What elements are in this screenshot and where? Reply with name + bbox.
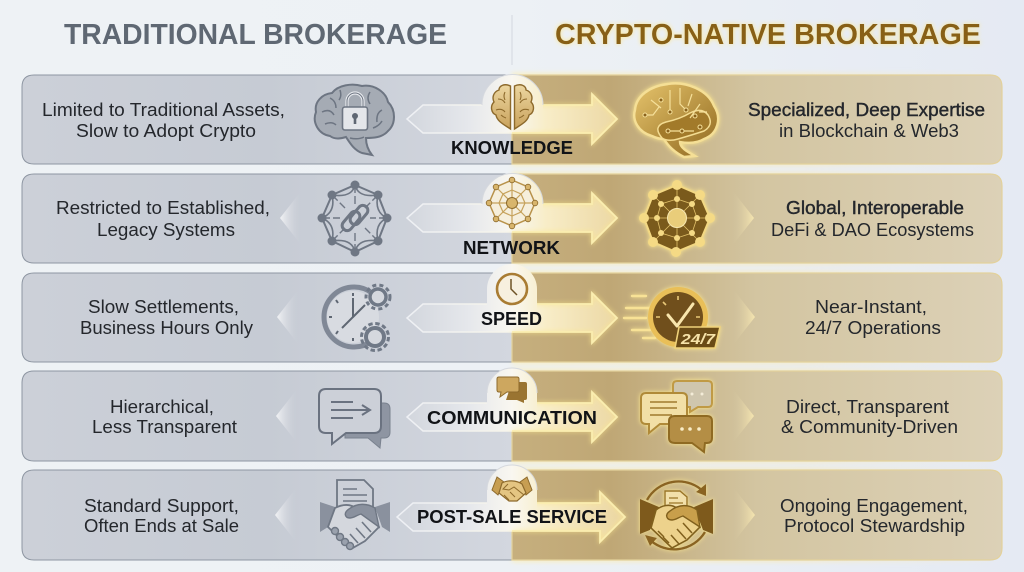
panel: crypto knowledge	[512, 75, 1002, 164]
text: crypto speed: 24/7 Operations	[805, 318, 941, 338]
panel: crypto network	[512, 174, 1002, 263]
icon: 24/7 clock	[624, 287, 720, 348]
icon: broken chain network	[318, 180, 392, 256]
panel: crypto post-sale	[512, 470, 1002, 560]
arrow: knowledge	[407, 94, 617, 144]
panel: traditional post-sale	[22, 470, 512, 560]
text: traditional network: Legacy Systems	[97, 220, 235, 240]
text: crypto post-sale	[780, 496, 968, 536]
text: crypto network: Global, Interoperable	[786, 198, 964, 218]
row: speed	[22, 264, 1002, 362]
icon: gold speech bubbles	[641, 381, 712, 452]
arrow: post-sale	[397, 492, 625, 542]
label: speed: SPEED	[481, 309, 542, 329]
chevron: right post-sale	[733, 487, 755, 543]
text: traditional knowledge: Limited to Traditional Assets,	[42, 100, 285, 120]
chevron: right network	[732, 190, 754, 246]
panel: traditional speed	[22, 273, 512, 362]
text: traditional communication	[92, 397, 237, 437]
text: traditional speed: Slow Settlements,	[88, 297, 239, 317]
chevron: right speed	[733, 289, 755, 345]
text: traditional post-sale	[84, 496, 239, 536]
panel glow: crypto side	[512, 75, 990, 560]
heading: crypto-native brokerage: CRYPTO-NATIVE BROKERAGE	[555, 19, 981, 51]
text: crypto post-sale: Ongoing Engagement,	[780, 496, 968, 516]
icon: speech bubbles	[319, 389, 390, 448]
label: network: NETWORK	[463, 238, 560, 258]
icon: circuit brain	[634, 83, 718, 157]
icon: gold handshake with cycle arrows	[640, 481, 713, 549]
text: traditional post-sale: Often Ends at Sale	[84, 516, 239, 536]
panel: traditional network	[22, 174, 512, 263]
icon badge: network	[482, 173, 543, 229]
icon badge: knowledge	[482, 74, 543, 129]
text: crypto communication: Direct, Transparent	[786, 397, 949, 417]
text: traditional knowledge	[42, 100, 285, 141]
text: crypto network	[771, 198, 974, 240]
icon: handshake with document	[320, 480, 390, 550]
row: network	[22, 173, 1002, 263]
icon badge: communication	[487, 368, 537, 410]
chevron: left communication	[276, 388, 298, 444]
text: crypto post-sale: Protocol Stewardship	[784, 516, 965, 536]
row: knowledge	[22, 74, 1002, 164]
icon: clock with gears	[324, 285, 390, 350]
panel: traditional knowledge	[22, 75, 512, 164]
icon badge: post-sale	[487, 465, 537, 510]
chevron: left post-sale	[275, 487, 297, 543]
text: traditional network	[56, 198, 270, 240]
text: crypto speed: Near-Instant,	[815, 297, 927, 317]
text: traditional communication: Less Transparent	[92, 417, 237, 437]
text: crypto communication	[781, 397, 958, 437]
heading: traditional brokerage: TRADITIONAL BROKERAGE	[64, 19, 447, 51]
text: traditional speed: Business Hours Only	[80, 318, 253, 338]
arrow: network	[407, 193, 617, 243]
text: crypto knowledge: Specialized, Deep Expertise	[748, 100, 985, 120]
text: traditional post-sale: Standard Support,	[84, 496, 239, 516]
text: traditional network: Restricted to Established,	[56, 198, 270, 218]
panel: traditional communication	[22, 371, 512, 461]
text: crypto knowledge: in Blockchain & Web3	[779, 121, 959, 141]
arrow: speed	[407, 293, 617, 343]
row: post-sale service	[22, 465, 1002, 560]
label: knowledge: KNOWLEDGE	[451, 138, 573, 158]
row: communication	[22, 368, 1002, 461]
text: crypto speed	[805, 297, 941, 338]
text: crypto network: DeFi & DAO Ecosystems	[771, 220, 974, 240]
text: crypto knowledge	[748, 100, 985, 141]
icon: brain with lock	[315, 85, 394, 155]
label: communication: COMMUNICATION	[427, 408, 597, 428]
text: traditional speed	[80, 297, 253, 338]
panel: crypto communication	[512, 371, 1002, 461]
chevron: right communication	[732, 388, 754, 444]
panel: crypto speed	[512, 273, 1002, 362]
icon: gold network	[639, 180, 715, 257]
text: traditional communication: Hierarchical,	[110, 397, 214, 417]
text: crypto communication: & Community-Driven	[781, 417, 958, 437]
label: post-sale service: POST-SALE SERVICE	[417, 507, 607, 527]
text: traditional knowledge: Slow to Adopt Crypto	[76, 121, 256, 141]
arrow: communication	[407, 392, 617, 442]
chevron: left speed	[277, 289, 299, 345]
icon: 24/7 clock: 24/7	[680, 331, 716, 348]
icon badge: speed	[487, 264, 537, 312]
chevron: left network	[280, 190, 302, 246]
